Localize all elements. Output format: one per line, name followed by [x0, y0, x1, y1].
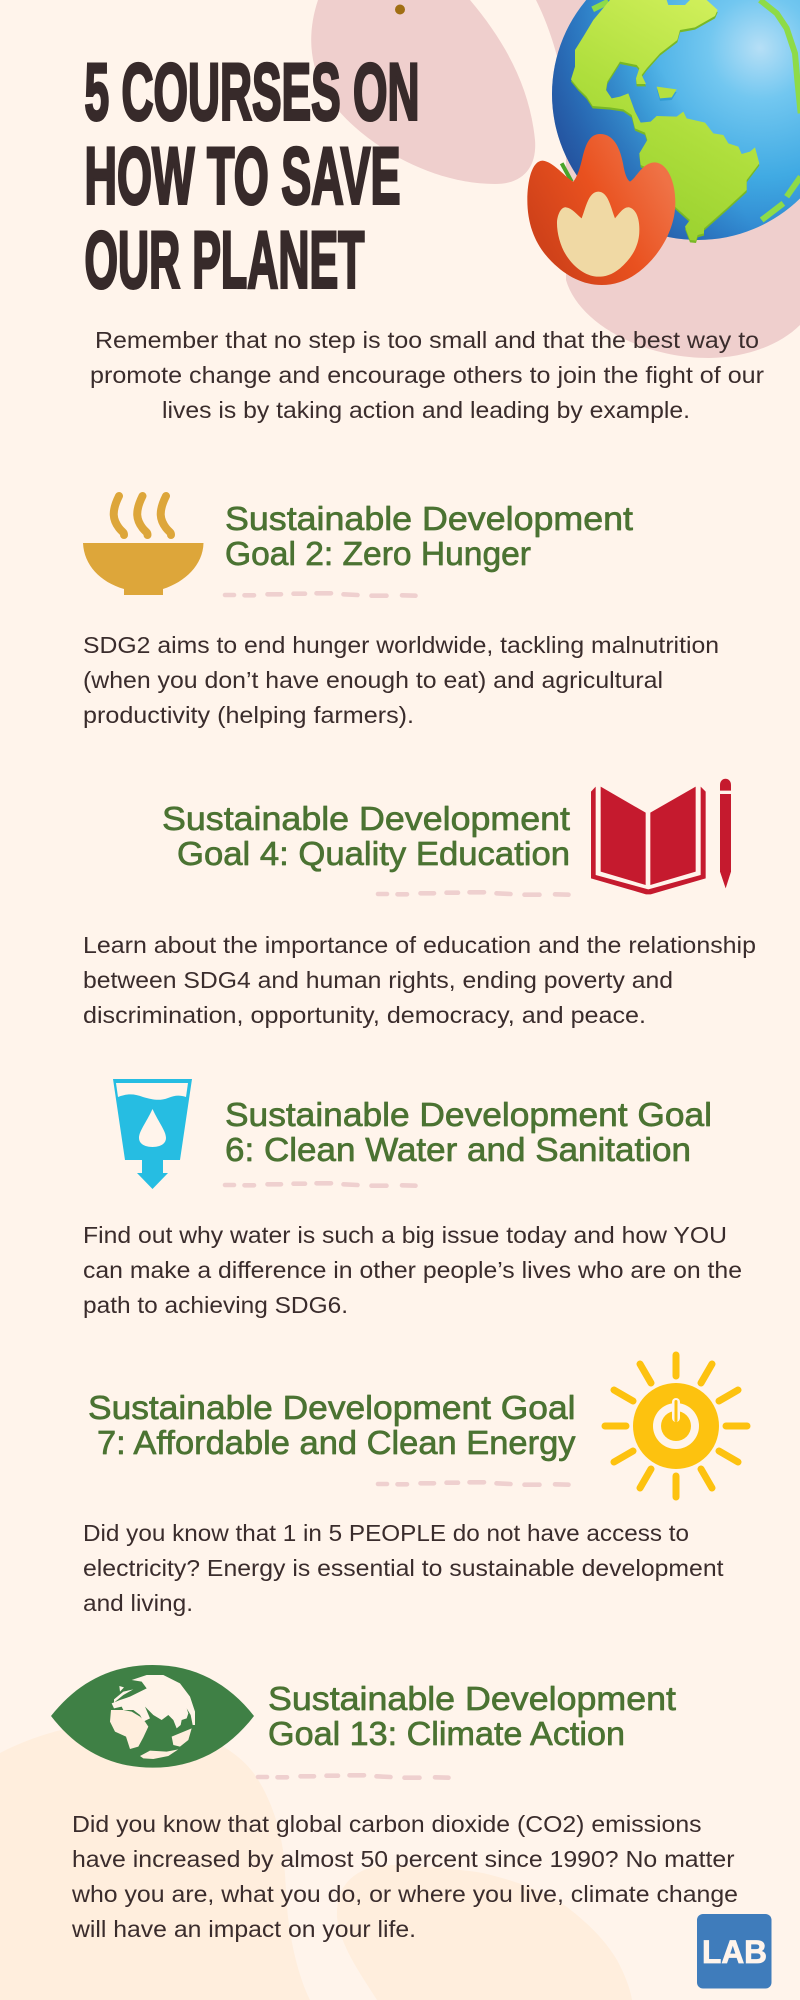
body text: Learn about the importance of education and the relationship — [83, 932, 756, 958]
panel: SDG 6 Clean Water and Sanitation — [83, 1079, 742, 1318]
heading: Goal 2: Zero Hunger — [225, 536, 531, 573]
body text — [83, 932, 756, 1028]
dashed underline — [225, 1183, 416, 1186]
title — [84, 48, 420, 306]
dashed underline — [378, 1482, 568, 1485]
body text — [83, 1222, 742, 1318]
body text: Did you know that global carbon dioxide (CO2) emissions — [72, 1811, 702, 1837]
body text: path to achieving SDG6. — [83, 1292, 348, 1318]
intro paragraph: Remember that no step is too small and that the best way to — [95, 327, 759, 353]
title: 5 COURSES ON — [84, 48, 420, 138]
heading — [225, 501, 634, 573]
heading: Sustainable Development — [162, 801, 571, 838]
heading: Sustainable Development — [225, 501, 634, 538]
body text: will have an impact on your life. — [71, 1916, 416, 1942]
body text: have increased by almost 50 percent since 1990? No matter — [72, 1846, 735, 1872]
heading — [268, 1681, 677, 1753]
small brown dot — [395, 4, 405, 14]
peach blobs — [0, 1721, 632, 2000]
panel: SDG 4 Quality Education — [83, 779, 756, 1028]
body text: productivity (helping farmers). — [83, 702, 414, 728]
icon: globe with flame — [527, 0, 800, 285]
panel: SDG 13 Climate Action — [51, 1665, 738, 1942]
icon: steaming bowl — [83, 496, 204, 595]
heading — [88, 1390, 576, 1462]
body text: and living. — [83, 1590, 193, 1616]
intro paragraph — [90, 327, 764, 423]
heading: Sustainable Development Goal — [225, 1097, 712, 1134]
title: OUR PLANET — [84, 216, 364, 306]
heading: 6: Clean Water and Sanitation — [225, 1132, 691, 1169]
body text: can make a difference in other people’s lives who are on the — [83, 1257, 742, 1283]
body text: who you are, what you do, or where you live, climate change — [71, 1881, 738, 1907]
body text — [83, 632, 719, 728]
body text: discrimination, opportunity, democracy, and peace. — [83, 1002, 646, 1028]
heading: Goal 13: Climate Action — [268, 1716, 625, 1753]
intro paragraph: lives is by taking action and leading by example. — [162, 397, 690, 423]
dashed underline — [378, 892, 568, 895]
body text: Find out why water is such a big issue today and how YOU — [83, 1222, 727, 1248]
dashed underline — [225, 593, 416, 596]
body text: between SDG4 and human rights, ending poverty and — [83, 967, 673, 993]
body text: (when you don’t have enough to eat) and agricultural — [83, 667, 663, 693]
heading: Sustainable Development — [268, 1681, 677, 1718]
logo: LAB badge — [697, 1914, 772, 1988]
heading — [162, 801, 571, 873]
icon: book and pencil — [591, 779, 731, 894]
heading: Sustainable Development Goal — [88, 1390, 576, 1427]
icon: sun with power symbol — [605, 1355, 747, 1497]
panel: SDG 7 Affordable and Clean Energy — [83, 1355, 747, 1616]
heading — [225, 1097, 712, 1169]
dashed underline — [258, 1775, 448, 1778]
body text: SDG2 aims to end hunger worldwide, tackling malnutrition — [83, 632, 719, 658]
panel: SDG 2 Zero Hunger — [83, 496, 719, 728]
body text — [83, 1520, 724, 1616]
intro paragraph: promote change and encourage others to join the fight of our — [90, 362, 764, 388]
icon: eye with globe — [51, 1665, 254, 1768]
logo: LAB badge: LAB — [702, 1934, 767, 1970]
pink blobs — [311, 0, 800, 358]
title: HOW TO SAVE — [84, 132, 400, 222]
heading: Goal 4: Quality Education — [177, 836, 570, 873]
icon: water glass with drop — [113, 1079, 192, 1189]
body text: Did you know that 1 in 5 PEOPLE do not have access to — [83, 1520, 689, 1546]
body text: electricity? Energy is essential to sustainable development — [83, 1555, 724, 1581]
body text — [71, 1811, 738, 1942]
heading: 7: Affordable and Clean Energy — [97, 1425, 576, 1462]
